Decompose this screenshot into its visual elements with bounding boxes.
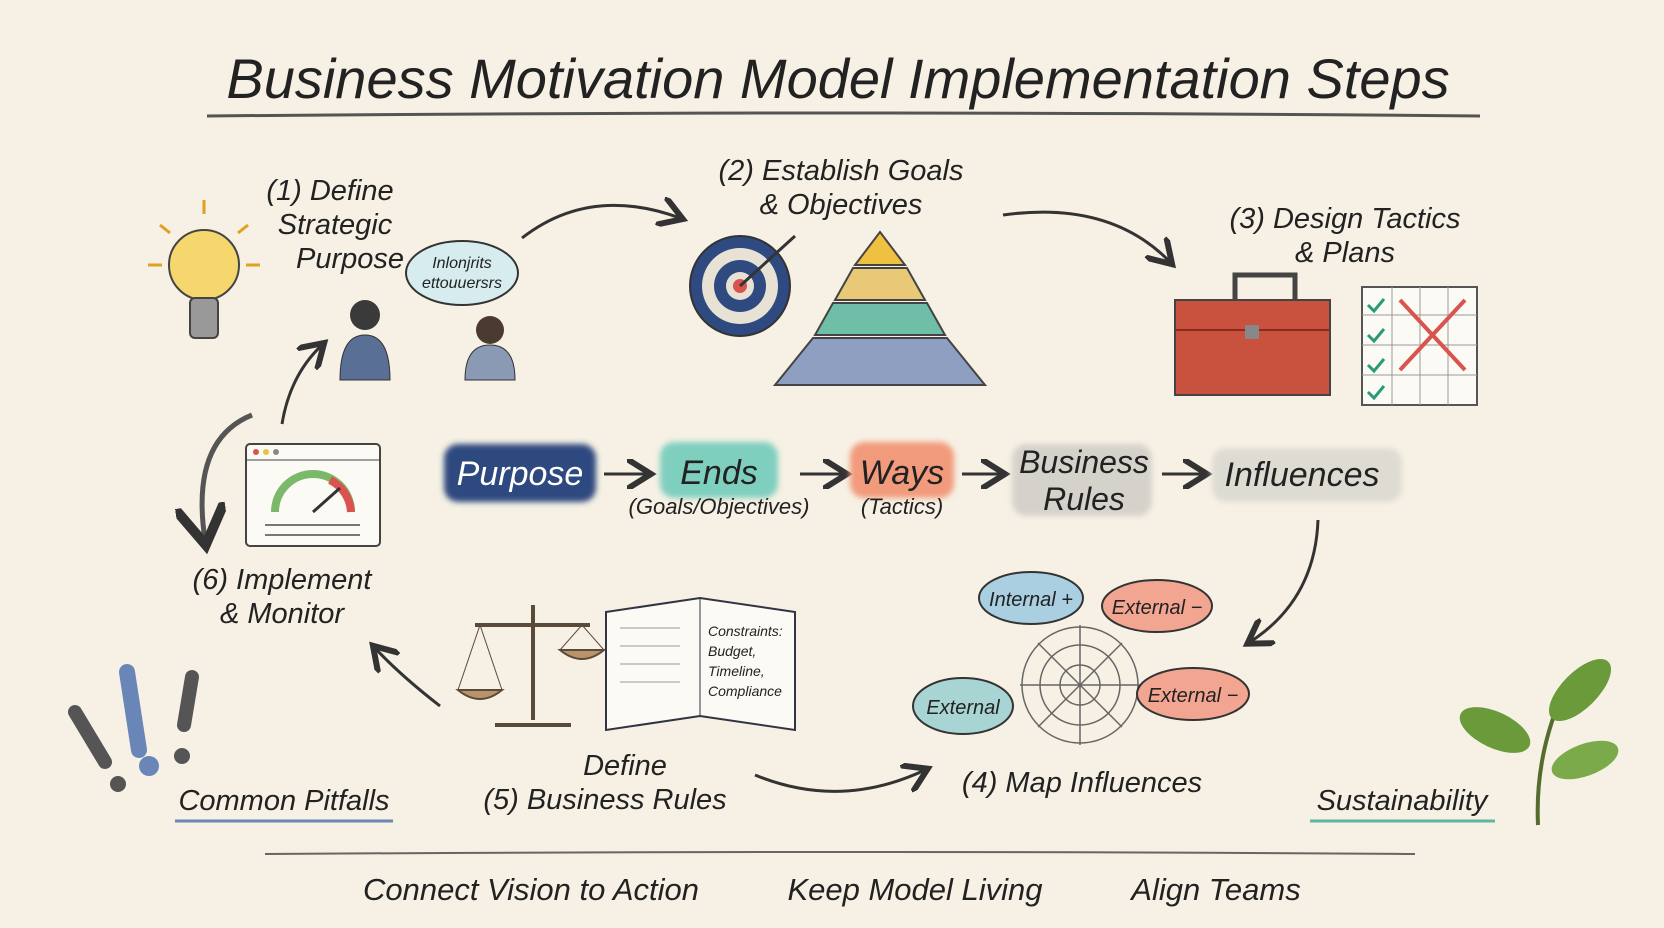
chip: influences bbox=[1212, 448, 1402, 502]
chip: ends: (Goals/Objectives) bbox=[629, 494, 809, 519]
label: Common Pitfalls bbox=[178, 785, 390, 817]
bubble: external - top bbox=[1102, 580, 1212, 632]
label: (6) Implement bbox=[193, 564, 373, 596]
chip: purpose bbox=[444, 444, 596, 502]
icon: book: Budget, bbox=[708, 643, 756, 659]
icon: light bulb bbox=[148, 200, 260, 338]
icon: plant bbox=[1453, 649, 1623, 825]
arrows loop bbox=[282, 345, 322, 424]
icon: people talking: Inlonjrits bbox=[432, 255, 492, 272]
label bbox=[193, 564, 373, 630]
label: Define bbox=[583, 750, 667, 782]
chip: purpose: Purpose bbox=[457, 455, 583, 493]
chip: business rules bbox=[1012, 444, 1152, 517]
arrow 5 to 4 bbox=[755, 770, 925, 791]
label: Sustainability bbox=[1317, 785, 1489, 817]
arrow 1 to 2 bbox=[522, 205, 680, 238]
bubble: external - bottom bbox=[1137, 668, 1249, 720]
icon: dashboard gauge bbox=[246, 444, 380, 546]
chip: ways: (Tactics) bbox=[861, 494, 943, 519]
chip: ways bbox=[850, 442, 954, 519]
label: Purpose bbox=[296, 243, 404, 275]
label: & Monitor bbox=[220, 598, 345, 630]
icon: exclamations bbox=[75, 672, 192, 792]
chip: business rules: Rules bbox=[1043, 481, 1125, 517]
flow row: purpose to influences bbox=[444, 442, 1402, 519]
label: (1) Define bbox=[266, 175, 394, 207]
arrow bbox=[962, 472, 1002, 476]
step 4: map influences bbox=[913, 572, 1249, 799]
label: (2) Establish Goals bbox=[718, 155, 964, 187]
label bbox=[483, 750, 727, 816]
arrow bbox=[1162, 472, 1204, 476]
chip: ends: Ends bbox=[680, 454, 758, 492]
label: (4) Map Influences bbox=[962, 767, 1202, 799]
footer: Keep Model Living bbox=[787, 872, 1043, 907]
bubble: external - bottom: External − bbox=[1148, 685, 1238, 707]
icon: book: Timeline, bbox=[708, 663, 765, 679]
footer: Connect Vision to Action bbox=[363, 872, 699, 907]
sustainability bbox=[1310, 649, 1623, 825]
icon: web bbox=[1020, 625, 1140, 745]
footer: Align Teams bbox=[1129, 872, 1301, 907]
title: Business Motivation Model Implementation Steps bbox=[226, 47, 1450, 110]
label: & Plans bbox=[1295, 237, 1395, 269]
step 1: define strategic purpose bbox=[148, 175, 518, 380]
label bbox=[266, 175, 404, 275]
icon: toolbox bbox=[1175, 275, 1330, 395]
bubble: internal + bbox=[979, 572, 1083, 624]
bubble: external bbox=[913, 678, 1013, 734]
label: Strategic bbox=[278, 209, 393, 241]
arrow bbox=[800, 472, 844, 476]
arrow 2 to 3 bbox=[1003, 212, 1170, 262]
step 5: business rules bbox=[375, 598, 795, 816]
label: (3) Design Tactics bbox=[1229, 203, 1461, 235]
label bbox=[1229, 203, 1461, 269]
icon: people talking bbox=[340, 241, 518, 380]
chip: influences: Influences bbox=[1224, 456, 1380, 494]
step 3: tactics bbox=[1175, 203, 1477, 405]
common pitfalls bbox=[75, 672, 393, 821]
bubble: external - top: External − bbox=[1112, 597, 1202, 619]
icon: checklist bbox=[1362, 287, 1477, 405]
icon: book: Compliance bbox=[708, 683, 782, 699]
label: (5) Business Rules bbox=[483, 784, 727, 816]
icon: pyramid bbox=[775, 232, 985, 385]
icon: book bbox=[606, 598, 795, 730]
bubble: external: External bbox=[926, 697, 1000, 719]
footer bbox=[265, 852, 1415, 907]
icon: target bbox=[690, 236, 795, 336]
arrow influences to map bbox=[1250, 520, 1318, 642]
icon: book: Constraints: bbox=[708, 623, 783, 639]
chip: ways: Ways bbox=[860, 454, 944, 492]
icon: people talking: ettouuersrs bbox=[422, 275, 502, 292]
step 2: goals bbox=[690, 155, 985, 385]
arrow to 6 bbox=[375, 648, 440, 706]
icon: scale bbox=[458, 605, 604, 725]
label bbox=[718, 155, 964, 221]
step 6: implement & monitor bbox=[193, 345, 380, 630]
chip: ends bbox=[629, 442, 809, 519]
bubble: internal +: Internal + bbox=[989, 589, 1073, 611]
chip: business rules: Business bbox=[1019, 444, 1149, 480]
label: & Objectives bbox=[760, 189, 922, 221]
arrow bbox=[604, 472, 648, 476]
